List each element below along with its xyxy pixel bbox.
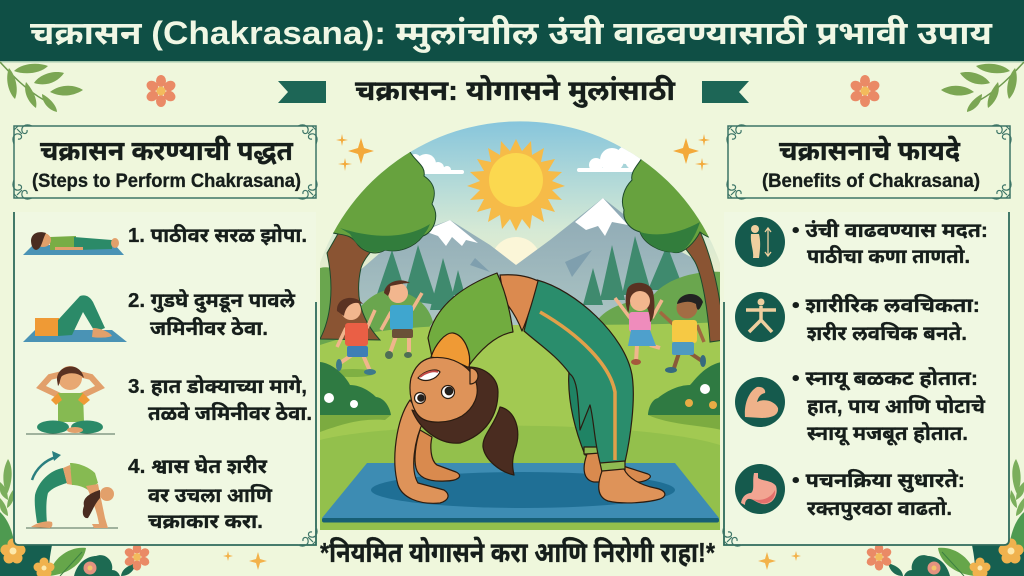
leaf sprig: top right [941, 62, 1024, 112]
back leg [569, 350, 609, 455]
flower: top right [849, 75, 881, 107]
step 3 text: 3. हात डोक्याच्या मागे, [128, 374, 307, 398]
benefit 3 text line 3: स्नायू मजबूत होतात. [807, 421, 968, 446]
icon: stomach [735, 464, 785, 514]
step 3 text line 2: तळवे जमिनीवर ठेवा. [148, 401, 312, 425]
icon: height [735, 217, 785, 267]
child blue shirt [381, 280, 422, 359]
ponytail [483, 407, 518, 475]
background bushes [320, 267, 722, 345]
benefits heading: चक्रासनाचे फायदे [779, 135, 961, 166]
child red shirt [331, 298, 376, 377]
step 1 text: 1. पाठीवर सरळ झोपा. [128, 223, 307, 247]
front foot [599, 469, 665, 503]
icon: flexibility [735, 292, 785, 342]
back arm [415, 430, 460, 481]
scene: arched yoga illustration [310, 120, 730, 530]
step 3 illustration [26, 366, 115, 434]
ribbon left [278, 81, 326, 103]
flower: top left [145, 75, 177, 107]
leaf sprig: top left [0, 62, 83, 112]
child pink dress [615, 283, 662, 365]
benefit 4 text line 2: रक्तपुरवठा वाढतो. [807, 496, 952, 521]
clouds [409, 146, 645, 174]
sparkles right of arch [673, 134, 710, 171]
step 4 illustration [26, 451, 118, 528]
child yellow shirt [660, 294, 706, 373]
ribbon right [702, 81, 749, 103]
step 2 text line 2: जमिनीवर ठेवा. [150, 316, 268, 340]
pine trees [375, 236, 684, 310]
title banner [0, 0, 1024, 62]
step 4 text: 4. श्वास घेत शरीर [128, 454, 268, 478]
panel: steps list [14, 212, 317, 546]
sparkles left of arch [336, 134, 374, 171]
step 4 text line 2: वर उचला आणि [148, 483, 273, 507]
benefit 2 text line 2: शरीर लवचिक बनते. [807, 321, 967, 345]
footer note: *नियमित योगासने करा आणि निरोगी राहा!* [320, 535, 715, 568]
face [410, 357, 477, 422]
benefits subtitle: (Benefits of Chakrasana) [762, 171, 980, 192]
benefit 1 text line 2: पाठीचा कणा ताणतो. [807, 244, 970, 268]
left tree [320, 152, 436, 340]
benefit 4 text: • पचनक्रिया सुधारते: [792, 468, 965, 493]
sleeve [431, 333, 470, 368]
pants [524, 280, 633, 466]
hair [412, 367, 498, 443]
girl in wheel pose [395, 273, 665, 503]
decorative foliage: bottom left [0, 459, 151, 576]
step 2 illustration [23, 295, 127, 342]
title text: चक्रासन (Chakrasana): म्मुलांचाील उंची वाढवण्यासाठी प्रभावी उपाय [30, 15, 993, 53]
benefit 2 text: • शारीरिक लवचिकता: [792, 293, 980, 317]
ground [320, 322, 720, 445]
shirt [428, 273, 513, 368]
foreground bushes [320, 362, 391, 415]
front arm [395, 400, 448, 503]
back foot [584, 453, 650, 482]
pale glow [495, 237, 538, 265]
right tree [622, 159, 720, 343]
step 1 illustration [23, 232, 124, 255]
step 2 text: 2. गुडघे दुमडून पावले [128, 288, 296, 313]
panel: benefits header [727, 125, 1011, 199]
benefit 3 text: • स्नायू बळकट होतात: [792, 366, 978, 391]
small sparkles at bottom [223, 551, 801, 570]
step 4 text line 3: चक्राकार करा. [148, 511, 263, 533]
panel: benefits list [723, 212, 1009, 546]
mat [322, 463, 719, 522]
steps subtitle: (Steps to Perform Chakrasana) [32, 171, 301, 192]
subtitle: चक्रासन: योगासने मुलांसाठी [355, 73, 676, 108]
panel: steps header [13, 125, 317, 199]
steps heading: चक्रासन करण्याची पद्धत [40, 136, 294, 166]
midriff [500, 275, 538, 331]
benefit 1 text: • उंची वाढवण्यास मदत: [792, 218, 988, 242]
benefit 3 text line 2: हात, पाय आणि पोटाचे [807, 394, 986, 418]
icon: muscle [735, 377, 785, 427]
mountains [359, 198, 715, 327]
sun [467, 139, 565, 231]
decorative foliage: bottom right [865, 459, 1024, 576]
